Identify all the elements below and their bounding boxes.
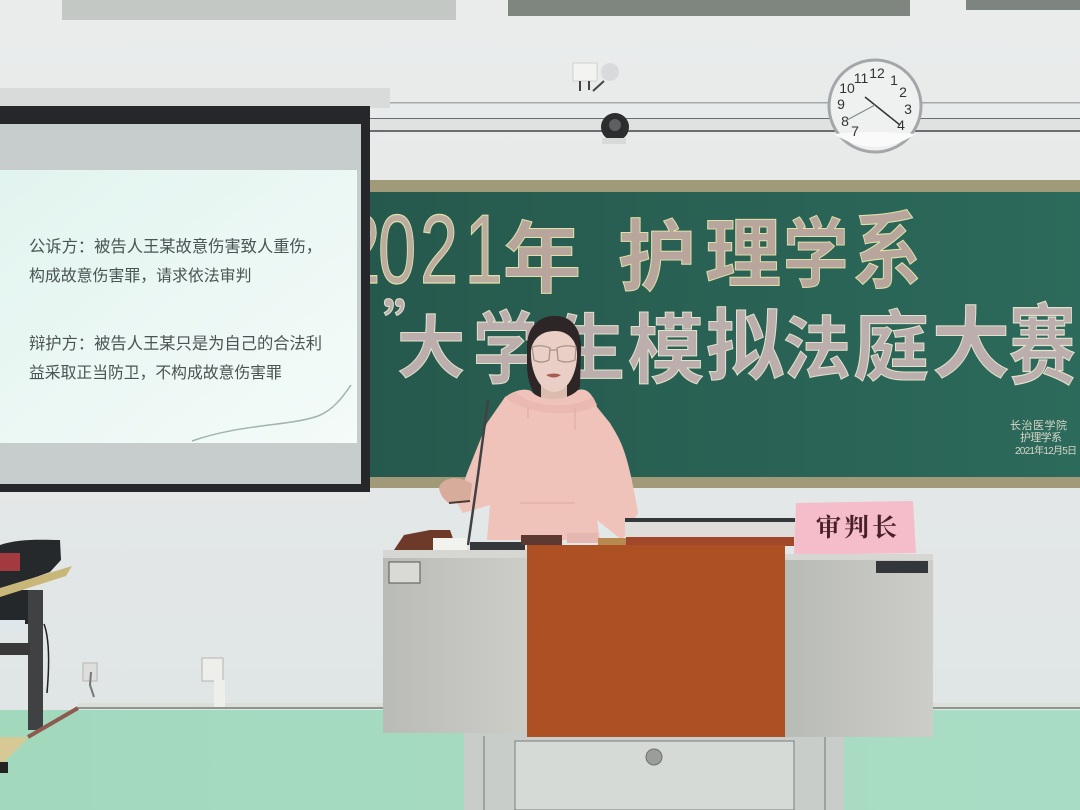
mouth xyxy=(546,374,561,378)
podium lock xyxy=(646,749,662,765)
wall clock: 11 xyxy=(854,70,868,86)
wall clock: 10 xyxy=(839,80,855,96)
projector screen xyxy=(0,88,390,499)
slide text: 益采取正当防卫，不构成故意伤害罪 xyxy=(29,363,282,382)
title chalk text line 1: 学 xyxy=(783,194,848,304)
title chalk text line 2 xyxy=(383,277,1076,403)
wall clock: 8 xyxy=(841,113,849,129)
title chalk text line 2: 庭 xyxy=(853,286,929,396)
wall clock: 2 xyxy=(899,84,907,100)
chalk signature: 2021年12月5日 xyxy=(1015,444,1077,457)
ceiling lights xyxy=(62,0,1080,20)
title chalk text line 1: 理 xyxy=(705,193,781,303)
title chalk text line 2: 大 xyxy=(932,282,1010,394)
title chalk text line 1: 系 xyxy=(853,184,921,305)
hand xyxy=(439,478,472,504)
left desk and backpack xyxy=(0,540,78,773)
slide text: 辩护方：被告人王某只是为自己的合法利 xyxy=(29,335,322,353)
title chalk text line 1: 2021 xyxy=(342,194,503,304)
name plate xyxy=(794,501,916,555)
wall clock: 4 xyxy=(897,117,905,133)
wall clock: 1 xyxy=(890,72,898,88)
slide text: 公诉方：被告人王某故意伤害致人重伤， xyxy=(29,237,322,256)
hoodie xyxy=(457,390,638,540)
title chalk text line 2: 法 xyxy=(783,294,851,393)
wall clock xyxy=(829,60,921,152)
neck xyxy=(541,385,567,403)
chalk signature xyxy=(1010,418,1077,457)
wall clock: 7 xyxy=(851,123,859,139)
podium xyxy=(383,545,933,810)
slide text: 构成故意伤害罪，请求依法审判 xyxy=(29,266,251,285)
hair xyxy=(527,316,581,398)
blackboard xyxy=(342,180,1080,488)
title chalk text line 2: 赛 xyxy=(1009,277,1076,403)
name plate: 审判长 xyxy=(816,508,900,544)
slide text xyxy=(29,237,322,382)
title chalk text line 2: 模 xyxy=(628,289,704,399)
wall sockets xyxy=(83,658,225,707)
title chalk text line 2: 大 xyxy=(397,293,465,392)
wall clock: 12 xyxy=(869,65,885,81)
title chalk text line 1 xyxy=(342,184,921,309)
wall clock: 9 xyxy=(837,96,845,112)
microphone xyxy=(468,400,488,545)
chalk signature: 长治医学院 xyxy=(1010,418,1067,432)
desk top items xyxy=(394,518,795,550)
title chalk text line 2: ” xyxy=(383,282,437,361)
title chalk text line 2: 学 xyxy=(473,285,538,400)
floor xyxy=(0,703,1080,810)
hood folds xyxy=(505,392,597,413)
face xyxy=(531,331,577,392)
title chalk text line 2: 拟 xyxy=(706,284,784,396)
wall clock: 3 xyxy=(904,101,912,117)
title chalk text line 1: 年 xyxy=(503,197,581,309)
glasses xyxy=(532,346,576,362)
title chalk text line 2: 生 xyxy=(553,290,625,395)
chalk signature: 护理学系 xyxy=(1020,430,1062,444)
sensor box xyxy=(573,63,619,91)
speaker xyxy=(439,316,638,545)
wall wires xyxy=(370,102,1080,132)
projected slide xyxy=(0,170,357,443)
title chalk text line 1: 护 xyxy=(618,195,696,307)
security camera xyxy=(601,113,629,144)
